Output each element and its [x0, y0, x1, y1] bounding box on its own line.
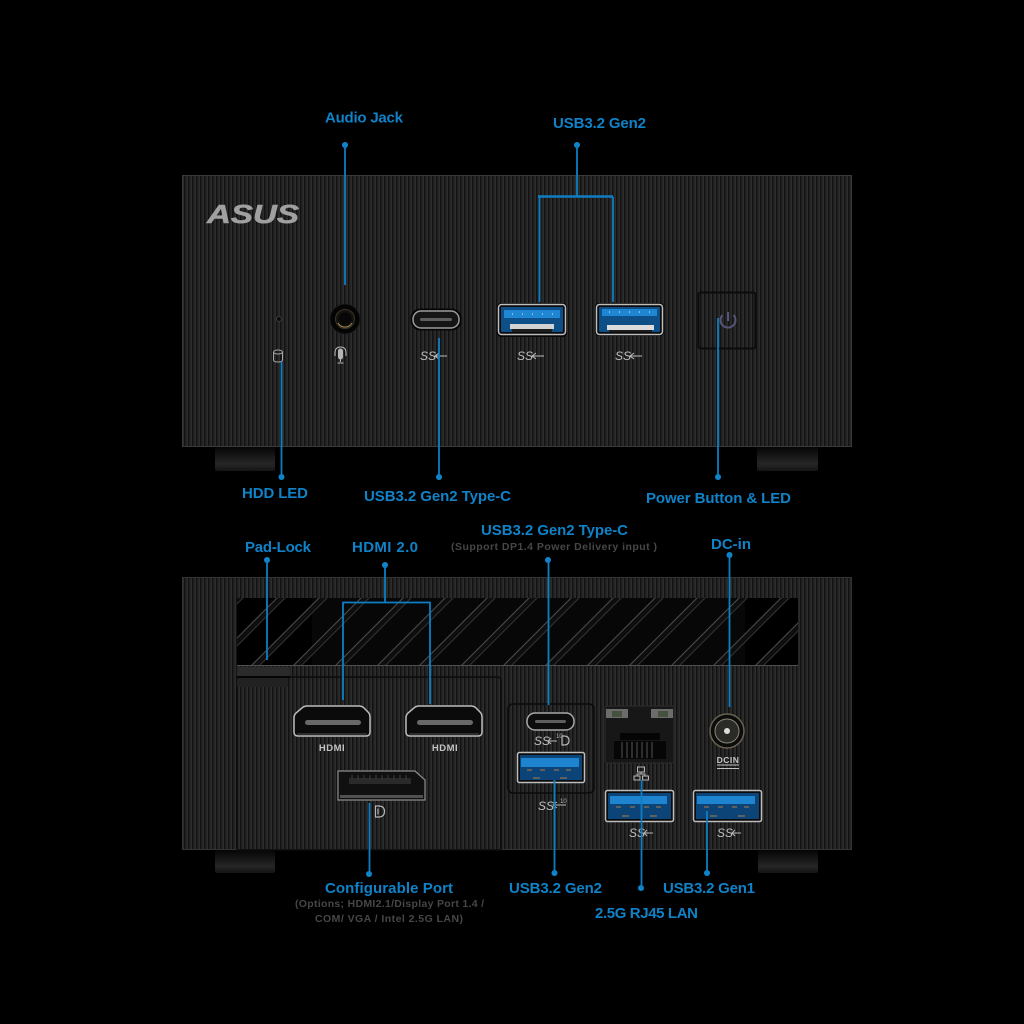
- SuperSpeed 10 mark: 10: [560, 799, 567, 805]
- rear chassis: [182, 578, 852, 850]
- SuperSpeed mark: [517, 349, 544, 363]
- callout: USB3.2 Gen2 Type-C rear: [451, 522, 657, 705]
- rear ventilation grille: [237, 598, 798, 666]
- SuperSpeed 10 mark: [538, 799, 567, 813]
- rear USB-A port stacked: [518, 752, 584, 782]
- SuperSpeed mark: SS: [615, 349, 631, 363]
- rear USB-C port: [527, 713, 574, 730]
- icon: headset microphone: [335, 347, 346, 363]
- callout: USB3.2 Gen2 front: USB3.2 Gen2: [553, 115, 646, 132]
- SuperSpeed mark: [615, 349, 642, 363]
- callout: USB3.2 Gen2 Type-C rear: USB3.2 Gen2 Type-C: [481, 522, 628, 539]
- callout: DC-in: [711, 536, 751, 707]
- RJ45 LAN port: [605, 706, 674, 763]
- ASUS logo: ASUS: [206, 199, 300, 229]
- callout: 2.5G RJ45 LAN: [595, 780, 698, 922]
- USB-C port: [410, 308, 462, 330]
- callout: USB3.2 Gen2 rear: USB3.2 Gen2: [509, 880, 602, 897]
- callout: HDD LED: [242, 362, 308, 502]
- SuperSpeed mark: SS: [629, 826, 645, 840]
- callout: USB3.2 Gen2 Type-C front: USB3.2 Gen2 Type-C: [364, 488, 511, 505]
- SuperSpeed 10 and DP mark: 10: [556, 734, 563, 740]
- callout: Configurable Port: Configurable Port: [325, 880, 453, 897]
- configurable port panel: [237, 677, 501, 850]
- callout: USB3.2 Gen1: [663, 811, 755, 897]
- DC-in jack: [710, 714, 744, 748]
- callout: USB3.2 Gen2 rear: [509, 780, 602, 897]
- callout: Configurable Port: (Options; HDMI2.1/Display Port 1.4 /: [295, 898, 484, 910]
- panel: front view of mini PC: [182, 176, 852, 471]
- USB-C and USB-A recessed panel: [508, 704, 594, 793]
- rear USB-A port middle: [606, 790, 674, 822]
- callout: USB3.2 Gen2 Type-C rear: (Support DP1.4 Power Delivery input ): [451, 541, 657, 553]
- callout: HDMI 2.0: HDMI 2.0: [352, 539, 418, 556]
- panel: rear view of mini PC: [182, 578, 852, 873]
- icon: power: [720, 312, 736, 328]
- icon: DisplayPort: [376, 806, 384, 817]
- SuperSpeed 10 and DP mark: SS: [534, 734, 550, 748]
- front chassis: [182, 176, 852, 446]
- SuperSpeed mark: [629, 826, 653, 840]
- SuperSpeed 10 and DP mark: [534, 734, 569, 748]
- DCIN label: DCIN: [717, 755, 739, 765]
- USB-A port 1: [497, 303, 567, 337]
- callout: HDD LED: HDD LED: [242, 485, 308, 502]
- SuperSpeed mark: SS: [420, 349, 436, 363]
- HDD LED light: [276, 316, 282, 322]
- HDMI port 2: [406, 706, 482, 736]
- DisplayPort port: [338, 771, 425, 800]
- callout: Power Button and LED: Power Button & LED: [646, 490, 791, 507]
- icon: hard drive: [274, 350, 282, 362]
- SuperSpeed mark: SS: [717, 826, 733, 840]
- callout: 2.5G RJ45 LAN: 2.5G RJ45 LAN: [595, 905, 698, 922]
- icon: network: [634, 767, 648, 780]
- callout: Audio Jack: [325, 110, 404, 285]
- SuperSpeed mark: SS: [517, 349, 533, 363]
- SuperSpeed 10 mark: SS: [538, 799, 554, 813]
- callout: USB3.2 Gen2 front: [538, 115, 646, 302]
- callout: HDMI 2.0: [343, 539, 430, 704]
- callout: USB3.2 Gen2 Type-C front: [364, 338, 511, 505]
- front right foot: [757, 447, 818, 471]
- SuperSpeed mark: [420, 349, 447, 363]
- callout: Configurable Port: COM/ VGA / Intel 2.5G LAN): [315, 913, 463, 925]
- callout: Power Button and LED: [646, 318, 791, 507]
- USB-A port 2: [595, 303, 664, 336]
- callout: Configurable Port: [295, 803, 484, 925]
- audio jack port: [330, 304, 360, 334]
- HDMI label 2: HDMI: [432, 743, 458, 754]
- callout: Pad-Lock: [245, 539, 312, 660]
- rear USB-A port right: [694, 790, 762, 822]
- callout: Pad-Lock: Pad-Lock: [245, 539, 312, 556]
- SuperSpeed mark: [717, 826, 741, 840]
- front left foot: [215, 447, 275, 471]
- rear right foot: [758, 850, 818, 873]
- rear left foot: [215, 850, 275, 873]
- power button: [698, 292, 756, 348]
- callout: DC-in: DC-in: [711, 536, 751, 553]
- callout: USB3.2 Gen1: USB3.2 Gen1: [663, 880, 755, 897]
- callout: Audio Jack: Audio Jack: [325, 110, 404, 126]
- HDMI port 1: [294, 706, 370, 736]
- pad-lock post: [237, 667, 290, 687]
- HDMI label 1: HDMI: [319, 743, 345, 754]
